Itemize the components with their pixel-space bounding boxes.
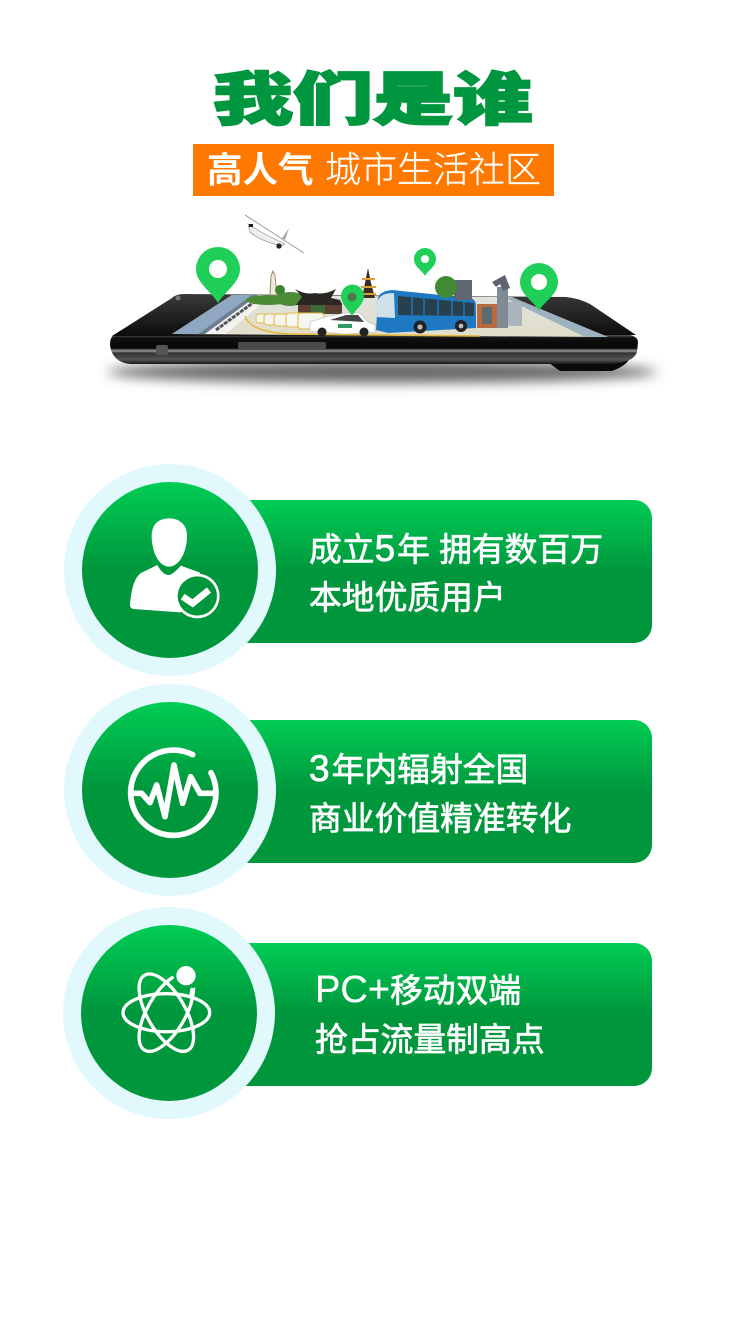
row 3 text: PC+移动双端 (315, 969, 521, 1011)
dark pagoda (361, 268, 376, 298)
phone screen map (172, 295, 608, 337)
phone shadow (107, 361, 657, 383)
map pin centre (341, 284, 364, 316)
row of taxis (256, 313, 375, 336)
title: 我们是谁 (213, 53, 533, 137)
illustration: phone with city scene (104, 214, 660, 392)
row 3 badge (63, 907, 275, 1119)
map pin right (520, 263, 558, 311)
row 2 text: 3年内辐射全国 (309, 748, 528, 789)
map pin large left (196, 247, 240, 303)
row 1 badge (64, 464, 276, 676)
row 3 text: 抢占流量制高点 (315, 1021, 545, 1058)
phone body (110, 294, 638, 371)
subtitle banner (193, 144, 554, 196)
row 2 badge (64, 684, 276, 896)
subtitle banner: 高人气 (207, 150, 314, 190)
trees and white pagoda (246, 271, 304, 306)
icon: user with check (130, 518, 220, 618)
icon: atom (121, 966, 212, 1054)
row 2 bar (230, 720, 652, 863)
plane (245, 215, 304, 253)
icon: pulse in circle (128, 747, 219, 838)
map pin top (414, 248, 436, 276)
subtitle banner: 城市生活社区 (325, 149, 541, 190)
row 1 bar (230, 500, 652, 643)
row 2 text (309, 748, 571, 837)
blue bus (376, 290, 476, 334)
row 3 bar (230, 943, 652, 1086)
monument and buildings (477, 275, 522, 328)
row 3 text (315, 969, 545, 1058)
tree and grey building (435, 276, 472, 300)
row 1 text (309, 528, 603, 616)
row 1 text: 本地优质用户 (309, 579, 506, 616)
temple gate (295, 289, 342, 314)
row 2 text: 商业价值精准转化 (309, 800, 571, 837)
row 1 text: 成立5年 拥有数百万 (309, 528, 603, 569)
